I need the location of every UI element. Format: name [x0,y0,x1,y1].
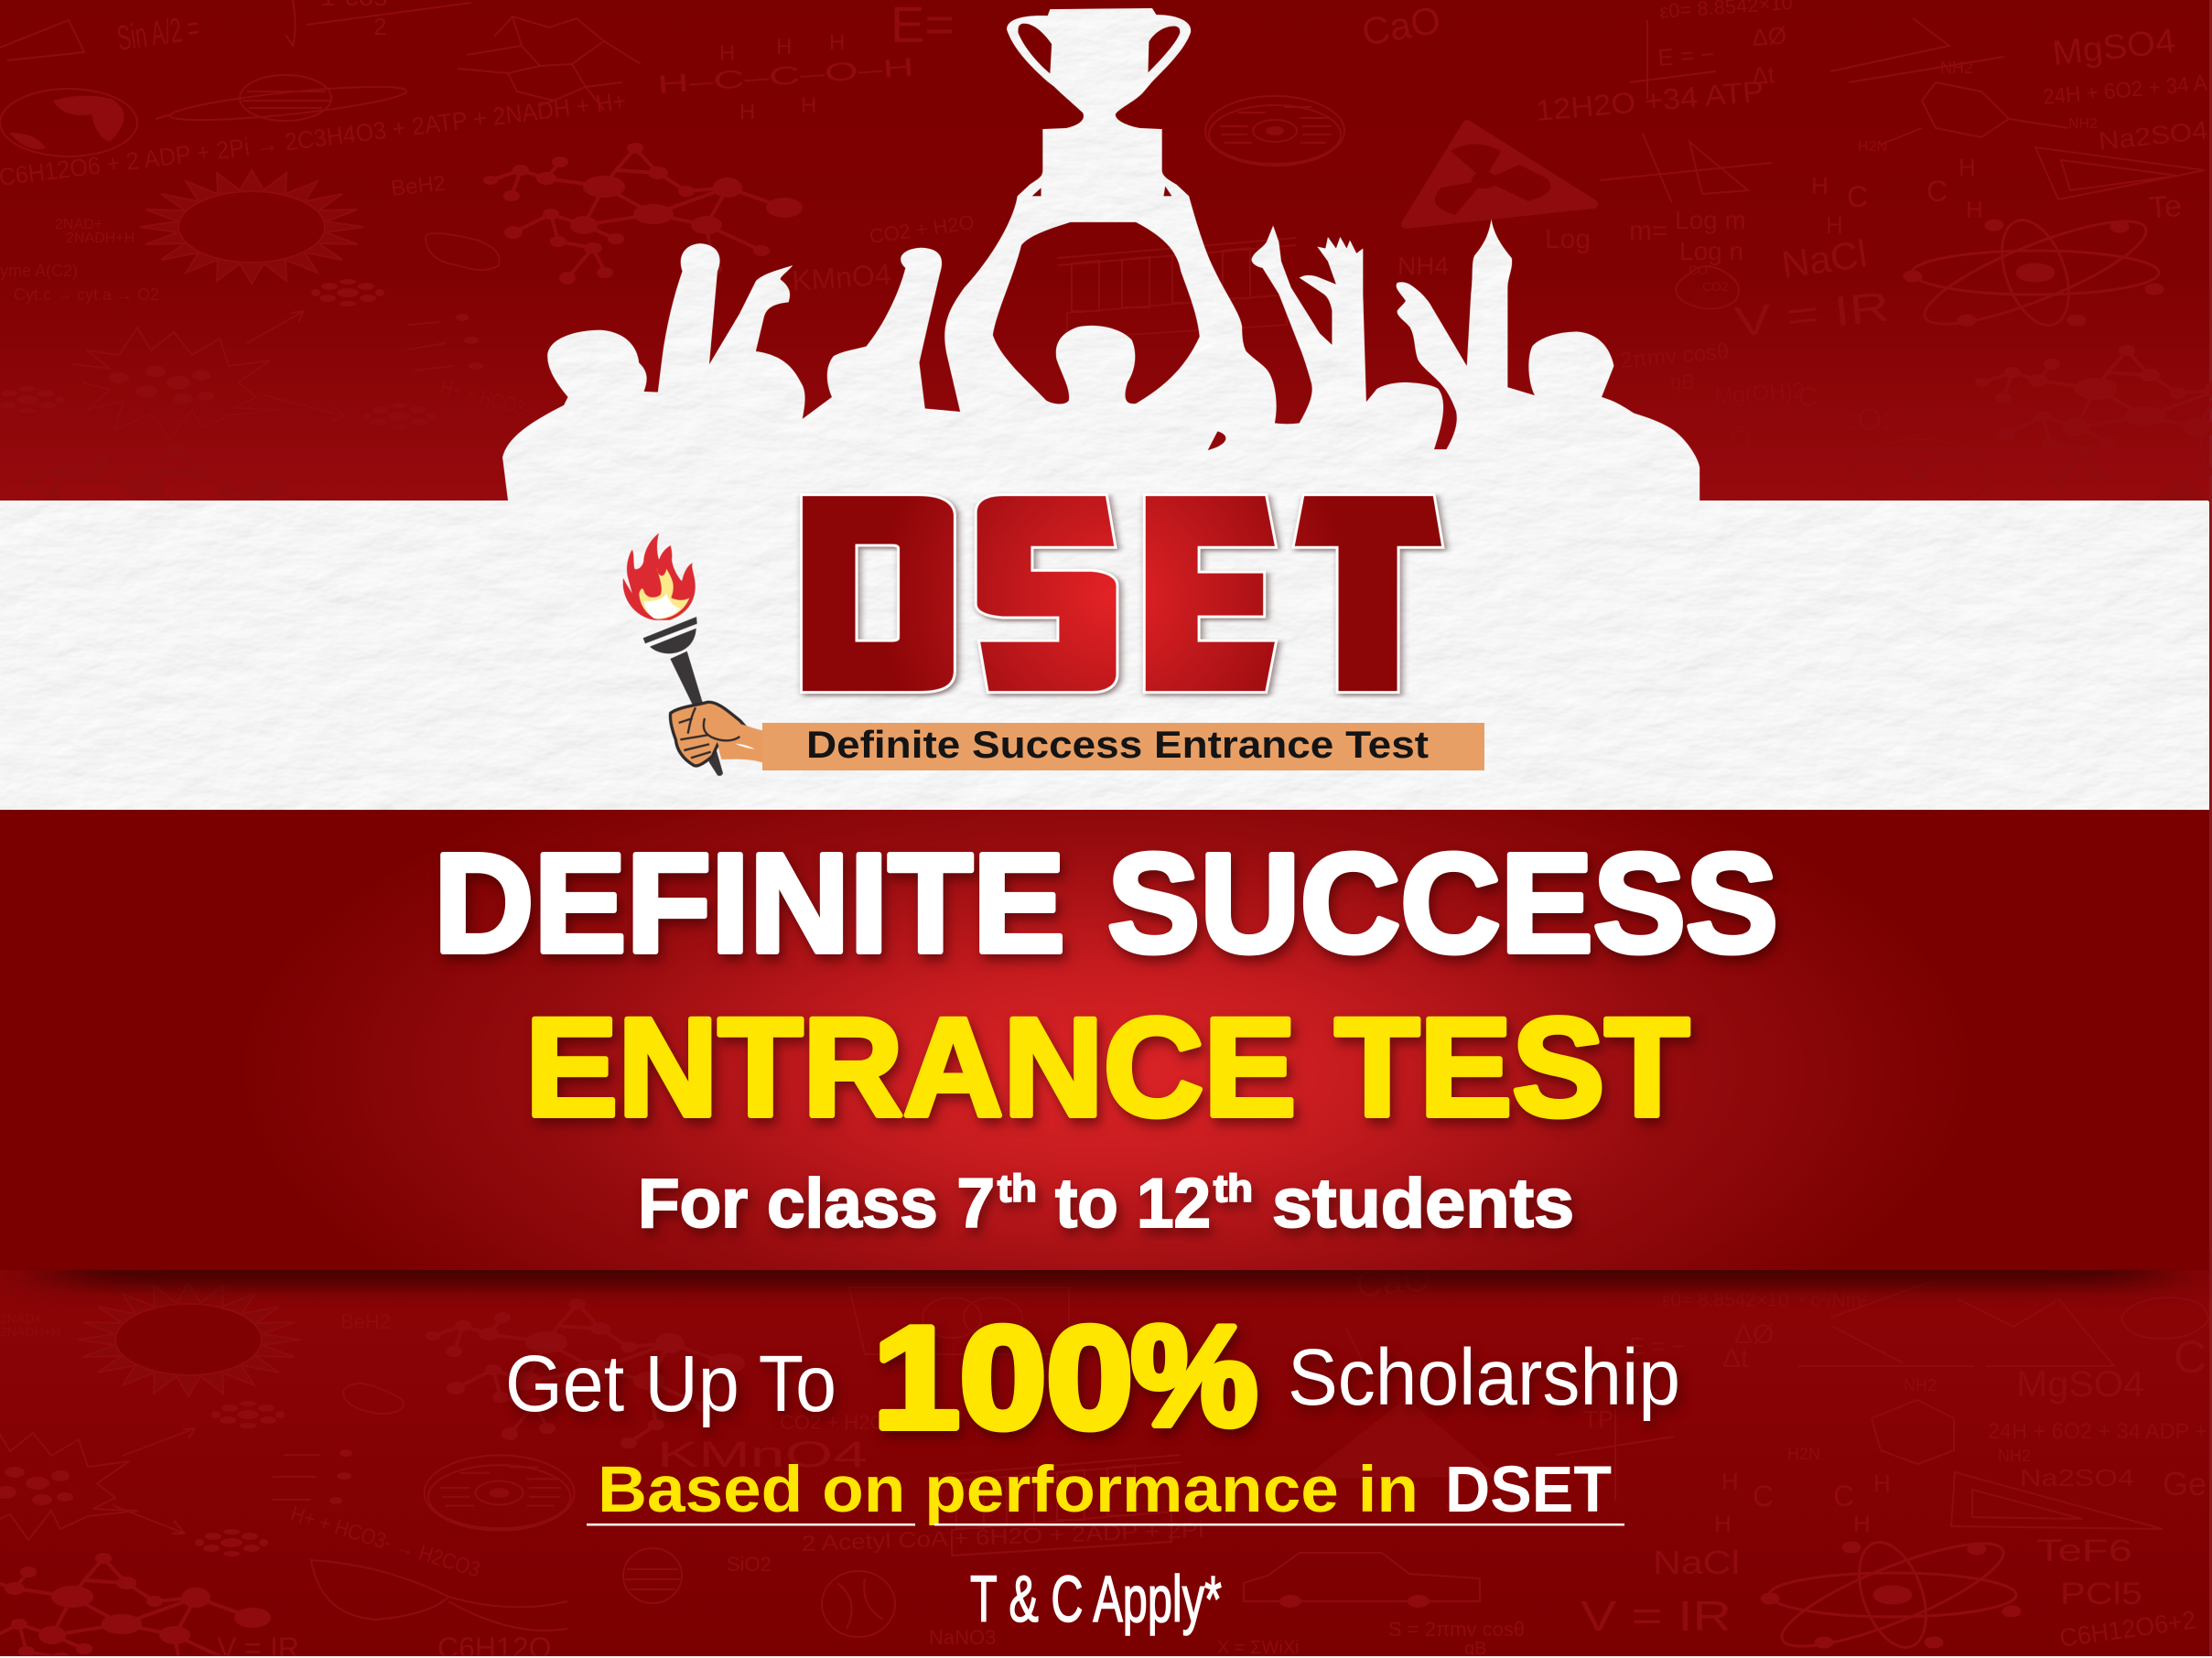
panel shadow: cast below the red banner [55,1255,2160,1287]
doodles: upper chemistry and physics sketches: NH2 [1940,59,1973,77]
doodles: upper chemistry and physics sketches: H [739,100,755,124]
footnote: terms and conditions: T & C Apply* [970,1564,1222,1636]
arm [717,721,787,770]
doodles: lower chemistry and physics sketches: C [1833,1480,1854,1513]
doodles: lower chemistry and physics sketches: NaNO3 [929,1626,996,1649]
doodles: lower chemistry and physics sketches: 2 Acetyl CoA + 6H2O + 2ADP + 2Pi [801,1518,1204,1556]
number: 100 percent [873,1297,1257,1459]
scholarship line [505,1297,1680,1459]
doodles: upper chemistry and physics sketches: H [776,35,792,59]
doodles: upper chemistry and physics sketches: 2NADH+H [66,231,135,246]
number: 100 percent: 100 [873,1297,1133,1459]
doodles: lower chemistry and physics sketches: TeF6 [2036,1534,2132,1568]
doodles: upper chemistry and physics sketches: m= [1629,216,1668,246]
subtitle: class range: th [998,1167,1037,1210]
strap text: Definite Success Entrance Test [806,723,1429,766]
doodles: upper chemistry and physics sketches: C [1847,180,1868,213]
doodles: upper chemistry and physics sketches: H [1958,154,1976,181]
text: get up to: Get Up To [505,1340,836,1428]
doodles: upper chemistry and physics sketches: H [829,30,845,55]
doodles: lower chemistry and physics sketches: MgSO4 [2016,1364,2144,1405]
doodles: upper chemistry and physics sketches: 2 [373,13,386,40]
doodles: lower chemistry and physics sketches: NH2 [1904,1376,1937,1394]
saturn planet [168,75,408,127]
doodles: lower chemistry and physics sketches: BeH2 [340,1310,391,1333]
doodles: upper chemistry and physics sketches: CO2 + H2O [868,210,976,248]
doodles: upper chemistry and physics sketches: H2N [1858,139,1887,155]
earth globe [0,89,137,156]
doodles: upper chemistry and physics sketches: E = − [1656,40,1715,71]
doodles: lower chemistry and physics sketches: H [1721,1468,1739,1495]
doodles: lower chemistry and physics sketches: C6H12O6+2 [2058,1605,2197,1653]
doodles: upper chemistry and physics sketches: KMnO4 [791,258,892,297]
doodles: upper chemistry and physics sketches: V = IR [1732,282,1892,346]
text: scholarship: Scholarship [1288,1333,1680,1422]
doodles: upper chemistry and physics sketches: Na2SO4 [2097,116,2209,156]
hand [670,702,748,766]
heading: Definite Success: SUCCESS [1107,824,1778,982]
doodles: upper chemistry and physics sketches: CO [1689,263,1708,277]
doodles: upper chemistry and physics sketches: Cyt.c → cyt.a → O2 [14,285,159,304]
doodles: lower chemistry and physics sketches: E = − [1629,1332,1686,1360]
doodles: lower chemistry and physics sketches: S = 2πmv cosθ [1388,1618,1525,1641]
doodles: lower chemistry and physics sketches: H [1873,1470,1891,1497]
doodles: lower chemistry and physics sketches: H+ + HCO3- → H2CO3 [287,1502,483,1583]
doodles: upper chemistry and physics sketches [0,0,2212,591]
doodles: upper chemistry and physics sketches: Mg(OH)2 [1714,378,1806,409]
doodles: lower chemistry and physics sketches: X = ΣWiXi [1217,1638,1300,1658]
doodles: lower chemistry and physics sketches: Δt [1722,1343,1749,1373]
subtitle: class range: students [1272,1165,1574,1243]
doodles: lower chemistry and physics sketches: Na2SO4 [2020,1464,2134,1491]
condition line with underline: Based on performance in [598,1454,1419,1526]
subtitle: class range [638,1165,1574,1243]
bottom edge line [0,1656,2212,1658]
illustration: crowd silhouette lifting a trophy [502,8,1699,503]
doodles: upper chemistry and physics sketches: 2NAD+ [55,217,103,232]
doodles: upper chemistry and physics sketches: yme A(C2) [0,262,78,280]
logo: DSET wordmark [802,495,1443,693]
doodles: upper chemistry and physics sketches: NH4 [1397,252,1449,280]
doodles: upper chemistry and physics sketches: H [801,93,816,118]
doodles: lower chemistry and physics sketches: CO2 + H2O [780,1411,886,1434]
doodles: upper chemistry and physics sketches: Log [1545,224,1591,254]
doodles: upper chemistry and physics sketches: Log n [1679,237,1743,265]
doodles: upper chemistry and physics sketches: H [719,41,735,66]
doodles: lower chemistry and physics sketches: NaCl [1653,1544,1740,1581]
radiation hazard triangle lower [1314,1403,1489,1475]
panel: paper band with cheering crowd and trophy [0,8,2208,810]
doodles: lower chemistry and physics sketches [0,1258,2208,1658]
number: 100 percent: % [1131,1297,1257,1455]
doodles: lower chemistry and physics sketches: C [1753,1480,1774,1513]
doodles: lower chemistry and physics sketches: Ge [2163,1465,2207,1502]
doodles: lower chemistry and physics sketches: KMnO4 [657,1435,868,1475]
doodles: upper chemistry and physics sketches: H [1826,211,1843,239]
doodles: lower chemistry and physics sketches: 2NAD+ [0,1311,42,1326]
heading: Definite Success: DEFINITE [434,824,1065,982]
doodles: lower chemistry and physics sketches: NH2 [1998,1447,2031,1465]
doodles: upper chemistry and physics sketches: Log m [1675,206,1746,234]
doodles: upper chemistry and physics sketches: :O: [1849,403,1890,437]
doodles: upper chemistry and physics sketches: CO2 [1702,279,1729,294]
doodles: upper chemistry and physics sketches: Sin A/2 = [114,9,201,59]
doodles: lower chemistry and physics sketches: PCl5 [2060,1577,2142,1611]
panel: red banner with main title [0,810,2209,1270]
doodles: lower chemistry and physics sketches: ε0= 8.8542×10⁻² c²/Nm² [1662,1288,1868,1311]
doodles: upper chemistry and physics sketches: Te [2147,188,2183,226]
doodles: upper chemistry and physics sketches: H [1966,196,1983,223]
subtitle: class range: th [1214,1167,1253,1210]
doodles: upper chemistry and physics sketches: H–C–C–O–H [656,52,915,99]
doodles: upper chemistry and physics sketches: qB [1670,371,1695,393]
doodles: upper chemistry and physics sketches: C [1798,382,1818,413]
doodles: upper chemistry and physics sketches: C6H12O6 + 2 ADP + 2Pi → 2C3H4O3 + 2ATP + 2NADH + H+ [0,87,628,191]
doodles: upper chemistry and physics sketches: NH2 [2068,116,2098,132]
banner strap [762,723,1484,770]
doodles: lower chemistry and physics sketches: V = IR [1581,1592,1732,1640]
flame [623,533,696,620]
torch handle [643,617,723,776]
doodles: lower chemistry and physics sketches: 2NADH+H [0,1324,60,1339]
doodles: upper chemistry and physics sketches: 12H2O +34 ATP [1534,74,1765,127]
condition line with underline: DSET [1445,1454,1612,1526]
icon: flaming torch held in a hand [623,533,787,776]
doodles: lower chemistry and physics sketches: 24H + 6O2 + 34 ADP + [1988,1419,2207,1444]
doodles: upper chemistry and physics sketches: H [1811,172,1829,199]
doodles: lower chemistry and physics sketches: SiO2 [727,1553,772,1576]
subtitle: class range: For class 7 [638,1165,995,1243]
heading: Definite Success [434,824,1778,982]
doodles: upper chemistry and physics sketches: H+ + HCO3- [437,375,533,423]
doodles: lower chemistry and physics sketches: C [2174,1331,2207,1383]
heading: Entrance Test: ENTRANCE TEST [525,989,1689,1146]
doodles: upper chemistry and physics sketches: Ö [1730,425,1751,455]
doodles: upper chemistry and physics sketches: ΔØ [1751,21,1787,51]
doodles: upper chemistry and physics sketches: Δt [1751,60,1776,90]
doodles: lower chemistry and physics sketches: H [1714,1510,1732,1537]
subtitle: class range: to 12 [1055,1165,1211,1243]
doodles: lower chemistry and physics sketches: CaO [1354,1258,1433,1306]
doodles: lower chemistry and physics sketches: H2N [1787,1445,1820,1463]
doodles: upper chemistry and physics sketches: MgSO4 [2051,22,2177,73]
doodles: upper chemistry and physics sketches: C [1926,175,1948,208]
doodles: upper chemistry and physics sketches: 2πmv cosθ [1619,339,1730,373]
doodles: upper chemistry and physics sketches: NaCl [1779,231,1870,286]
doodles: lower chemistry and physics sketches: H [1853,1510,1871,1537]
doodles: upper chemistry and physics sketches: BeH2 [390,171,447,201]
doodles: lower chemistry and physics sketches: ΔØ [1734,1319,1774,1350]
doodles: lower chemistry and physics sketches: TP [1583,1405,1613,1433]
radiation hazard triangle [1406,124,1593,224]
right edge strip [2209,0,2212,1658]
